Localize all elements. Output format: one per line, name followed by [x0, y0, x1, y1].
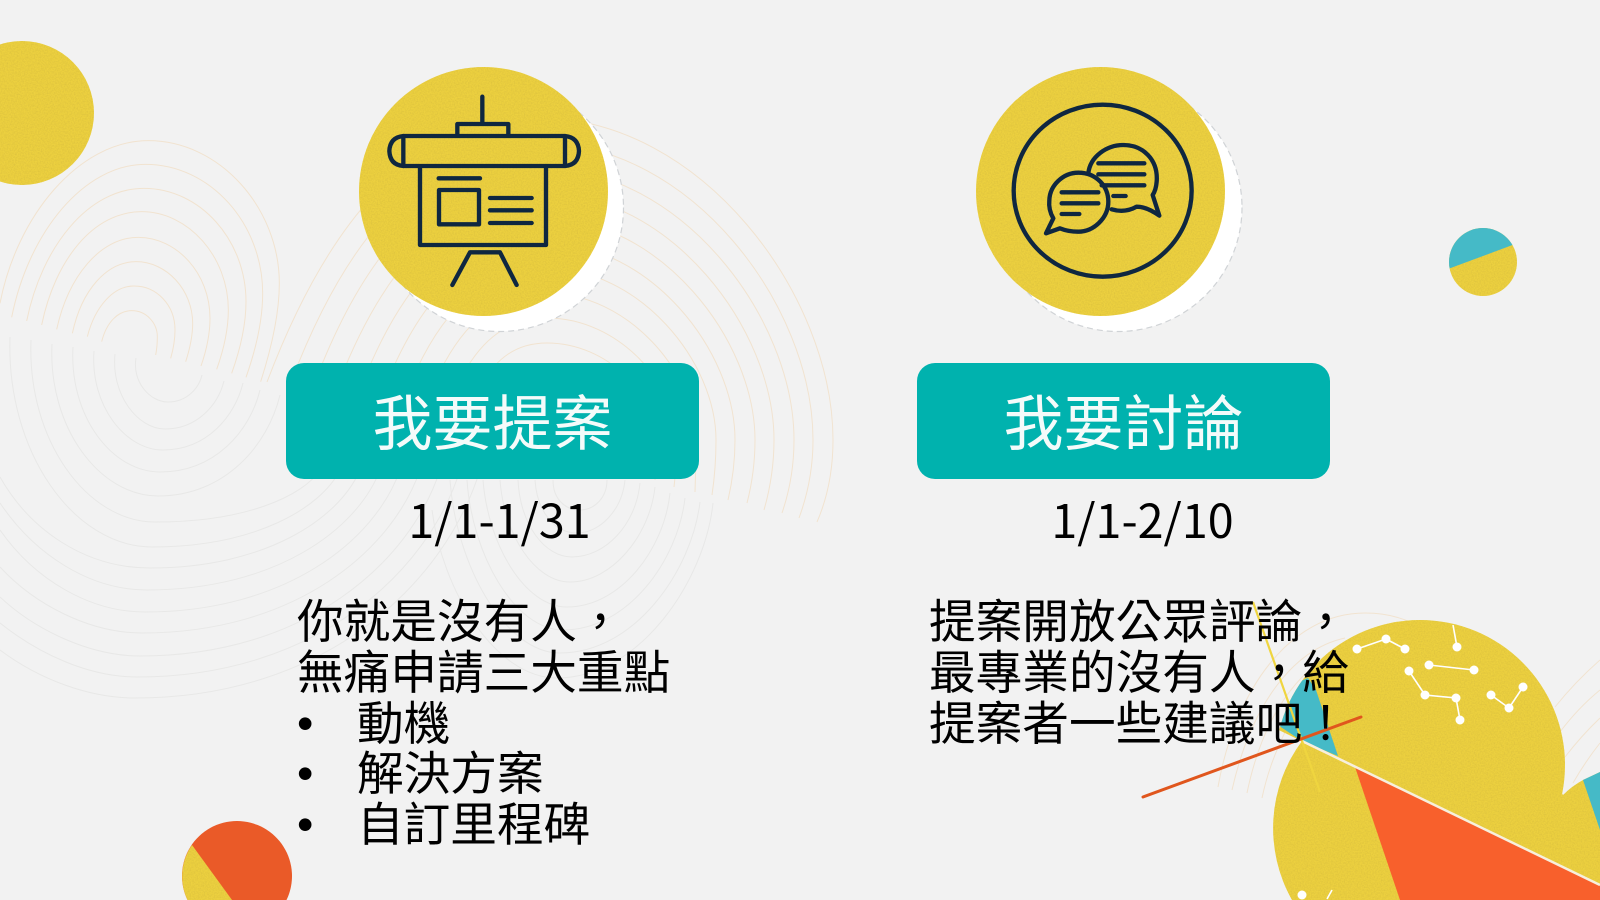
text block: proposal key points: 解決方案 [357, 737, 544, 804]
panel: proposal column [286, 67, 699, 855]
text block: proposal key points: • [297, 798, 313, 850]
text block: discussion description [929, 585, 1349, 754]
date: 1/1-1/31: 1/1-1/31 [408, 485, 591, 552]
text block: proposal key points: 自訂里程碑 [357, 788, 590, 855]
decoration: gold circle top left [0, 41, 94, 185]
text block: discussion description: 提案開放公眾評論， [929, 585, 1349, 652]
text block: proposal key points: 你就是沒有人， [297, 585, 624, 652]
text block: proposal key points: • [297, 747, 313, 799]
decoration: constellation globe bottom right [1143, 602, 1600, 900]
panel: discussion column [917, 67, 1349, 754]
button: 我要討論: 我要討論 [1004, 376, 1244, 463]
button: 我要提案: 我要提案 [372, 376, 612, 463]
button: 我要討論 [917, 363, 1330, 479]
text block: discussion description: 提案者一些建議吧！ [929, 687, 1349, 754]
background: fingerprint line pattern [0, 118, 1600, 798]
decoration: orange and gold circle bottom left [182, 821, 292, 900]
icon: speech bubbles in gold badge [976, 67, 1242, 332]
button: 我要提案 [286, 363, 699, 479]
text block: proposal key points: 無痛申請三大重點 [297, 636, 670, 703]
icon: presentation board in gold badge [359, 67, 624, 332]
text block: proposal key points [297, 585, 670, 855]
constellations [1298, 625, 1527, 899]
text block: proposal key points: • [297, 697, 313, 749]
decoration: teal and gold small circle [1449, 228, 1517, 296]
text block: discussion description: 最專業的沒有人，給 [929, 636, 1349, 703]
text block: proposal key points: 動機 [357, 687, 450, 754]
date: 1/1-2/10: 1/1-2/10 [1051, 485, 1234, 552]
